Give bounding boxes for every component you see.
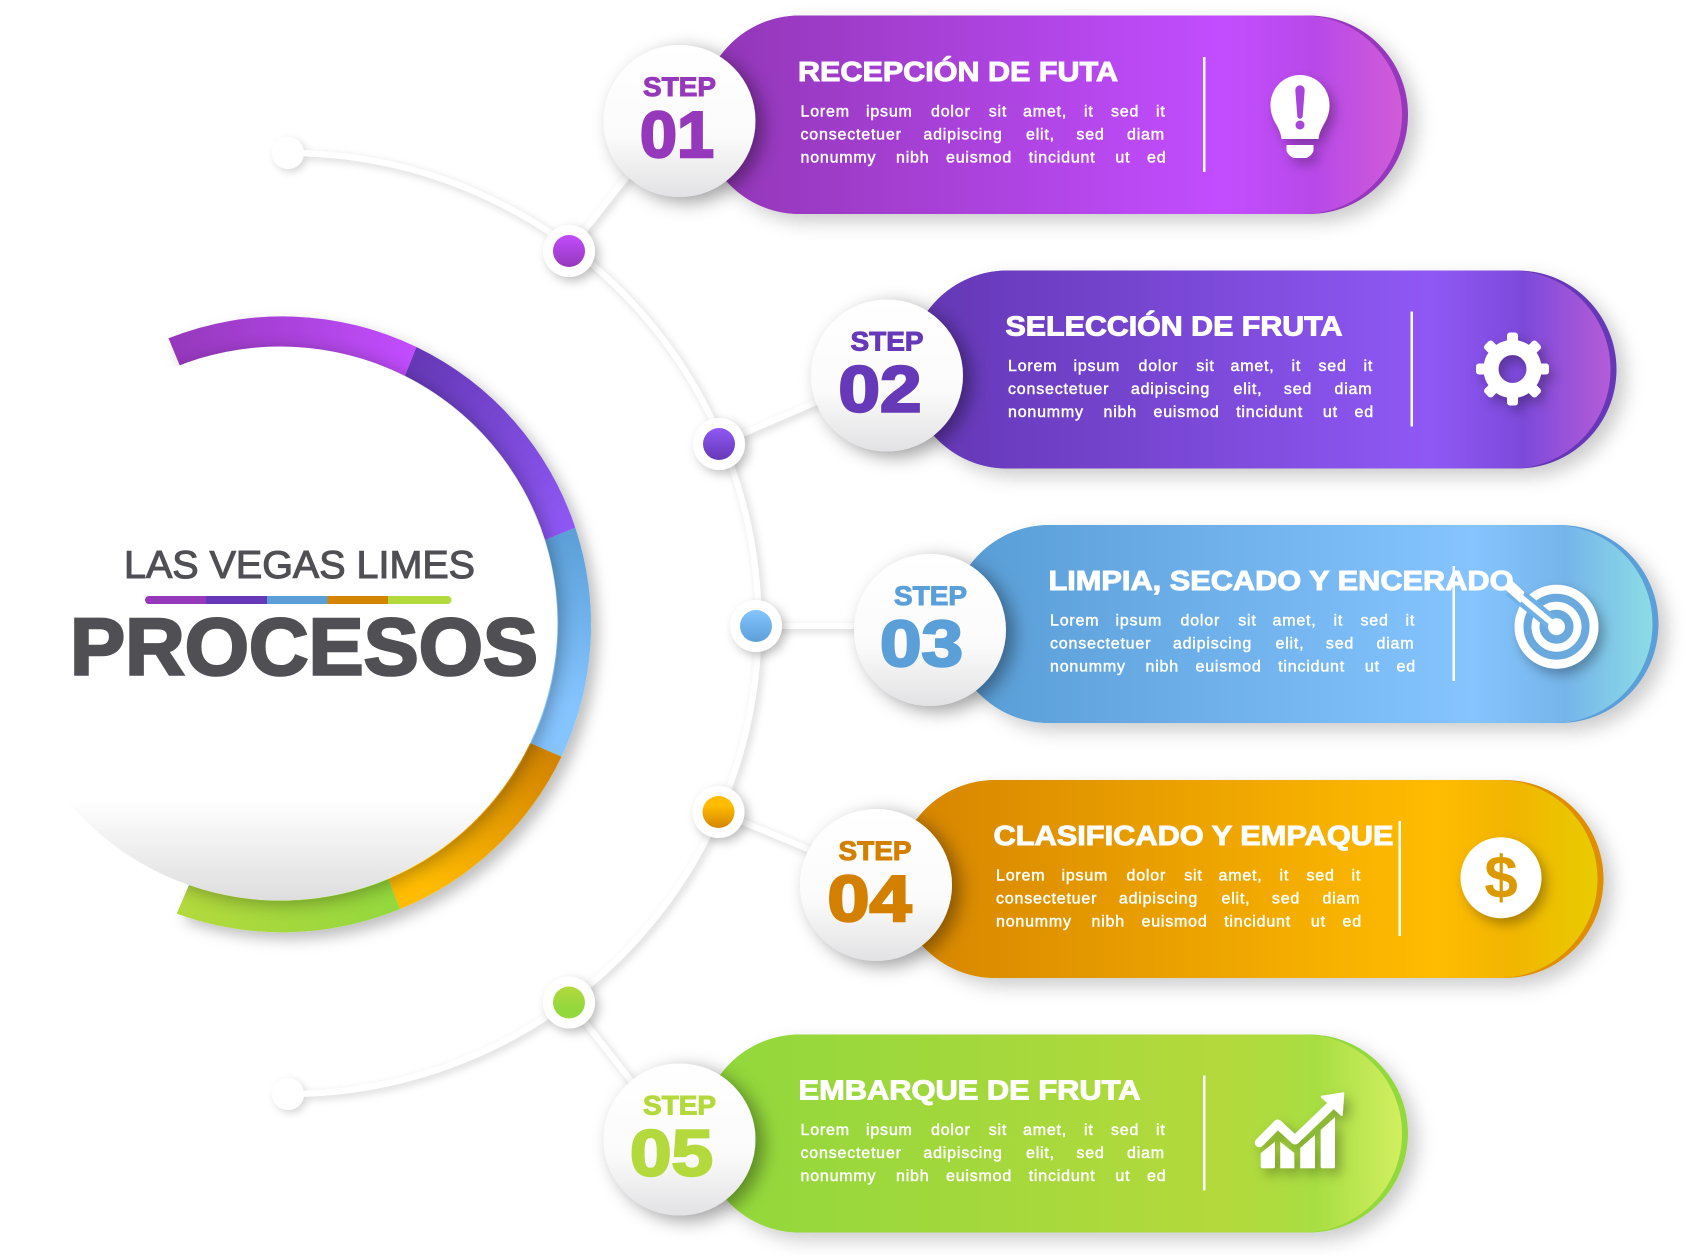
- icon: light bulb: [1270, 75, 1330, 158]
- step 2 body: elit,: [1234, 381, 1262, 398]
- step 2 body: it: [1364, 358, 1373, 375]
- step 5 body: dolor: [931, 1122, 971, 1139]
- step 2 body: dolor: [1138, 358, 1178, 375]
- step 2 label: STEP: [850, 326, 924, 356]
- panel: step 4: [800, 780, 1604, 978]
- step 1 body: it: [1084, 104, 1094, 121]
- step 3 heading: LIMPIA, SECADO Y ENCERADO: [1048, 565, 1514, 596]
- icon: gear: [1476, 332, 1549, 406]
- step 3 label: STEP: [894, 581, 967, 611]
- step 4 body: sed: [1272, 891, 1300, 908]
- node 1: [543, 225, 595, 277]
- step 5 body: elit,: [1026, 1145, 1055, 1162]
- icon: target: [1504, 581, 1594, 664]
- step 2 body: adipiscing: [1131, 381, 1210, 398]
- step 2 divider: [1410, 312, 1413, 426]
- step 3 divider: [1452, 566, 1455, 681]
- step 1 body: ed: [1147, 150, 1166, 167]
- icon: growth chart: [1259, 1093, 1343, 1168]
- icon: dollar coin: $: [1484, 844, 1518, 911]
- step 2 heading: SELECCIÓN DE FRUTA: [1006, 310, 1342, 342]
- step 2 badge: [811, 300, 963, 452]
- step 5 label: STEP: [643, 1090, 716, 1120]
- step 1 body: elit,: [1026, 127, 1055, 144]
- step 4 body: it: [1280, 868, 1289, 885]
- panel: step 5: [604, 1034, 1408, 1232]
- step 4 heading: CLASIFICADO Y EMPAQUE: [994, 820, 1394, 851]
- step 1 number: 01: [640, 98, 714, 171]
- step 3 body: [1050, 613, 1416, 676]
- step 1 body: euismod: [946, 150, 1012, 167]
- step 5 heading: EMBARQUE DE FRUTA: [798, 1074, 1140, 1106]
- step 3 body: amet,: [1272, 613, 1317, 630]
- step 3 body: tincidunt: [1278, 659, 1345, 676]
- step 4 body: Lorem: [996, 868, 1045, 885]
- step 2 body: ipsum: [1074, 358, 1120, 375]
- step 2 body: diam: [1334, 381, 1372, 398]
- step 2 number: 02: [838, 352, 922, 426]
- step 2 body: nibh: [1104, 404, 1137, 421]
- step 1 body: [800, 104, 1166, 167]
- step 3 badge: [854, 554, 1006, 706]
- step 5 body: amet,: [1023, 1122, 1067, 1139]
- step 4 body: consectetuer: [996, 891, 1097, 908]
- step 3 body: adipiscing: [1173, 636, 1252, 653]
- step 4 body: amet,: [1218, 868, 1263, 885]
- step 5 badge: [604, 1064, 756, 1216]
- step 2 body: Lorem: [1008, 358, 1057, 375]
- step 3 body: sit: [1238, 613, 1257, 630]
- step 1 body: it: [1156, 104, 1166, 121]
- step 5 divider: [1203, 1076, 1206, 1190]
- step 5 body: consectetuer: [800, 1145, 902, 1162]
- step 3 body: consectetuer: [1050, 636, 1151, 653]
- colour bar: [145, 596, 452, 604]
- step 1 heading: RECEPCIÓN DE FUTA: [798, 56, 1118, 87]
- step 4 number: 04: [828, 862, 912, 935]
- step 4 body: elit,: [1222, 891, 1250, 908]
- step 4 body: adipiscing: [1119, 891, 1198, 908]
- main title: Procesos: PROCESOS: [70, 602, 538, 692]
- step 4 body: nibh: [1092, 914, 1125, 931]
- step 3 body: sed: [1360, 613, 1389, 630]
- step 1 body: sed: [1111, 104, 1139, 121]
- step 5 body: sit: [989, 1122, 1007, 1139]
- panel: step 3: [854, 525, 1658, 723]
- step 2 body: ut: [1323, 404, 1338, 421]
- step 2 body: it: [1292, 358, 1301, 375]
- step 1 body: sit: [989, 104, 1007, 121]
- step 3 body: elit,: [1276, 636, 1304, 653]
- step 3 body: it: [1334, 613, 1343, 630]
- step 3 body: nonummy: [1050, 659, 1126, 676]
- step 2 body: ed: [1354, 404, 1374, 421]
- subtitle: Las Vegas Limes: LAS VEGAS LIMES: [124, 544, 475, 587]
- step 1 body: nonummy: [800, 150, 876, 167]
- panel: step 2: [811, 270, 1616, 468]
- connector arc with end dots: [272, 137, 870, 1110]
- step 5 body: sed: [1076, 1145, 1105, 1162]
- node 5: [543, 976, 595, 1028]
- step 1 body: tincidunt: [1029, 150, 1095, 167]
- step 1 body: dolor: [931, 104, 971, 121]
- step 1 body: amet,: [1023, 104, 1067, 121]
- step 5 body: it: [1156, 1122, 1166, 1139]
- node 2: [693, 418, 745, 470]
- step 2 body: amet,: [1230, 358, 1275, 375]
- step 1 divider: [1203, 57, 1206, 172]
- step 3 body: Lorem: [1050, 613, 1099, 630]
- step 1 badge: [604, 45, 756, 197]
- step 4 divider: [1398, 821, 1401, 936]
- icon: dollar coin: [1460, 837, 1542, 918]
- step 4 body: ipsum: [1062, 868, 1108, 885]
- step 4 body: tincidunt: [1224, 914, 1291, 931]
- step 1 body: Lorem: [800, 104, 850, 121]
- step 1 label: STEP: [643, 72, 716, 102]
- step 5 body: nonummy: [800, 1168, 876, 1185]
- step 5 body: Lorem: [800, 1122, 850, 1139]
- step 4 body: ut: [1311, 914, 1326, 931]
- step 3 body: dolor: [1180, 613, 1220, 630]
- step 2 body: sed: [1318, 358, 1347, 375]
- step 5 body: adipiscing: [923, 1145, 1003, 1162]
- step 3 body: ut: [1365, 659, 1380, 676]
- node 3: [730, 600, 782, 652]
- step 3 number: 03: [880, 607, 963, 680]
- step 4 body: ed: [1342, 914, 1362, 931]
- step 5 body: [800, 1122, 1166, 1185]
- step 4 body: nonummy: [996, 914, 1072, 931]
- step 3 body: it: [1406, 613, 1415, 630]
- step 5 body: ut: [1115, 1168, 1130, 1185]
- step 2 body: [1008, 358, 1374, 421]
- step 1 body: ut: [1115, 150, 1130, 167]
- step 1 body: sed: [1076, 127, 1105, 144]
- step 2 body: sit: [1196, 358, 1215, 375]
- panel: step 1: [604, 16, 1408, 214]
- step 1 body: nibh: [896, 150, 929, 167]
- step 2 body: sed: [1284, 381, 1312, 398]
- step 4 body: dolor: [1126, 868, 1166, 885]
- step 4 body: it: [1352, 868, 1361, 885]
- step 2 body: tincidunt: [1236, 404, 1303, 421]
- node 4: [692, 786, 744, 838]
- step 2 body: euismod: [1154, 404, 1220, 421]
- step 5 body: ed: [1147, 1168, 1166, 1185]
- step 5 body: ipsum: [866, 1122, 913, 1139]
- step 5 body: nibh: [896, 1168, 929, 1185]
- step 4 body: sed: [1306, 868, 1335, 885]
- step 1 body: consectetuer: [800, 127, 902, 144]
- step 3 body: ed: [1396, 659, 1416, 676]
- step 5 body: it: [1084, 1122, 1094, 1139]
- step 3 body: nibh: [1146, 659, 1179, 676]
- step 1 body: ipsum: [866, 104, 913, 121]
- step 2 body: consectetuer: [1008, 381, 1109, 398]
- step 2 body: nonummy: [1008, 404, 1084, 421]
- central circle: [3, 346, 557, 900]
- step 4 badge: [800, 809, 952, 961]
- progress ring: [168, 316, 591, 932]
- step 4 body: [996, 868, 1362, 931]
- step 3 body: ipsum: [1116, 613, 1162, 630]
- step 4 label: STEP: [838, 836, 912, 866]
- step 3 body: diam: [1376, 636, 1414, 653]
- step 5 body: sed: [1111, 1122, 1139, 1139]
- step 4 body: diam: [1322, 891, 1360, 908]
- step 5 number: 05: [630, 1116, 713, 1190]
- step 3 body: euismod: [1196, 659, 1262, 676]
- step 5 body: tincidunt: [1029, 1168, 1095, 1185]
- step 5 body: diam: [1127, 1145, 1165, 1162]
- step 1 body: diam: [1127, 127, 1165, 144]
- step 3 body: sed: [1326, 636, 1354, 653]
- step 4 body: sit: [1184, 868, 1203, 885]
- step 5 body: euismod: [946, 1168, 1012, 1185]
- step 1 body: adipiscing: [923, 127, 1003, 144]
- step 4 body: euismod: [1142, 914, 1208, 931]
